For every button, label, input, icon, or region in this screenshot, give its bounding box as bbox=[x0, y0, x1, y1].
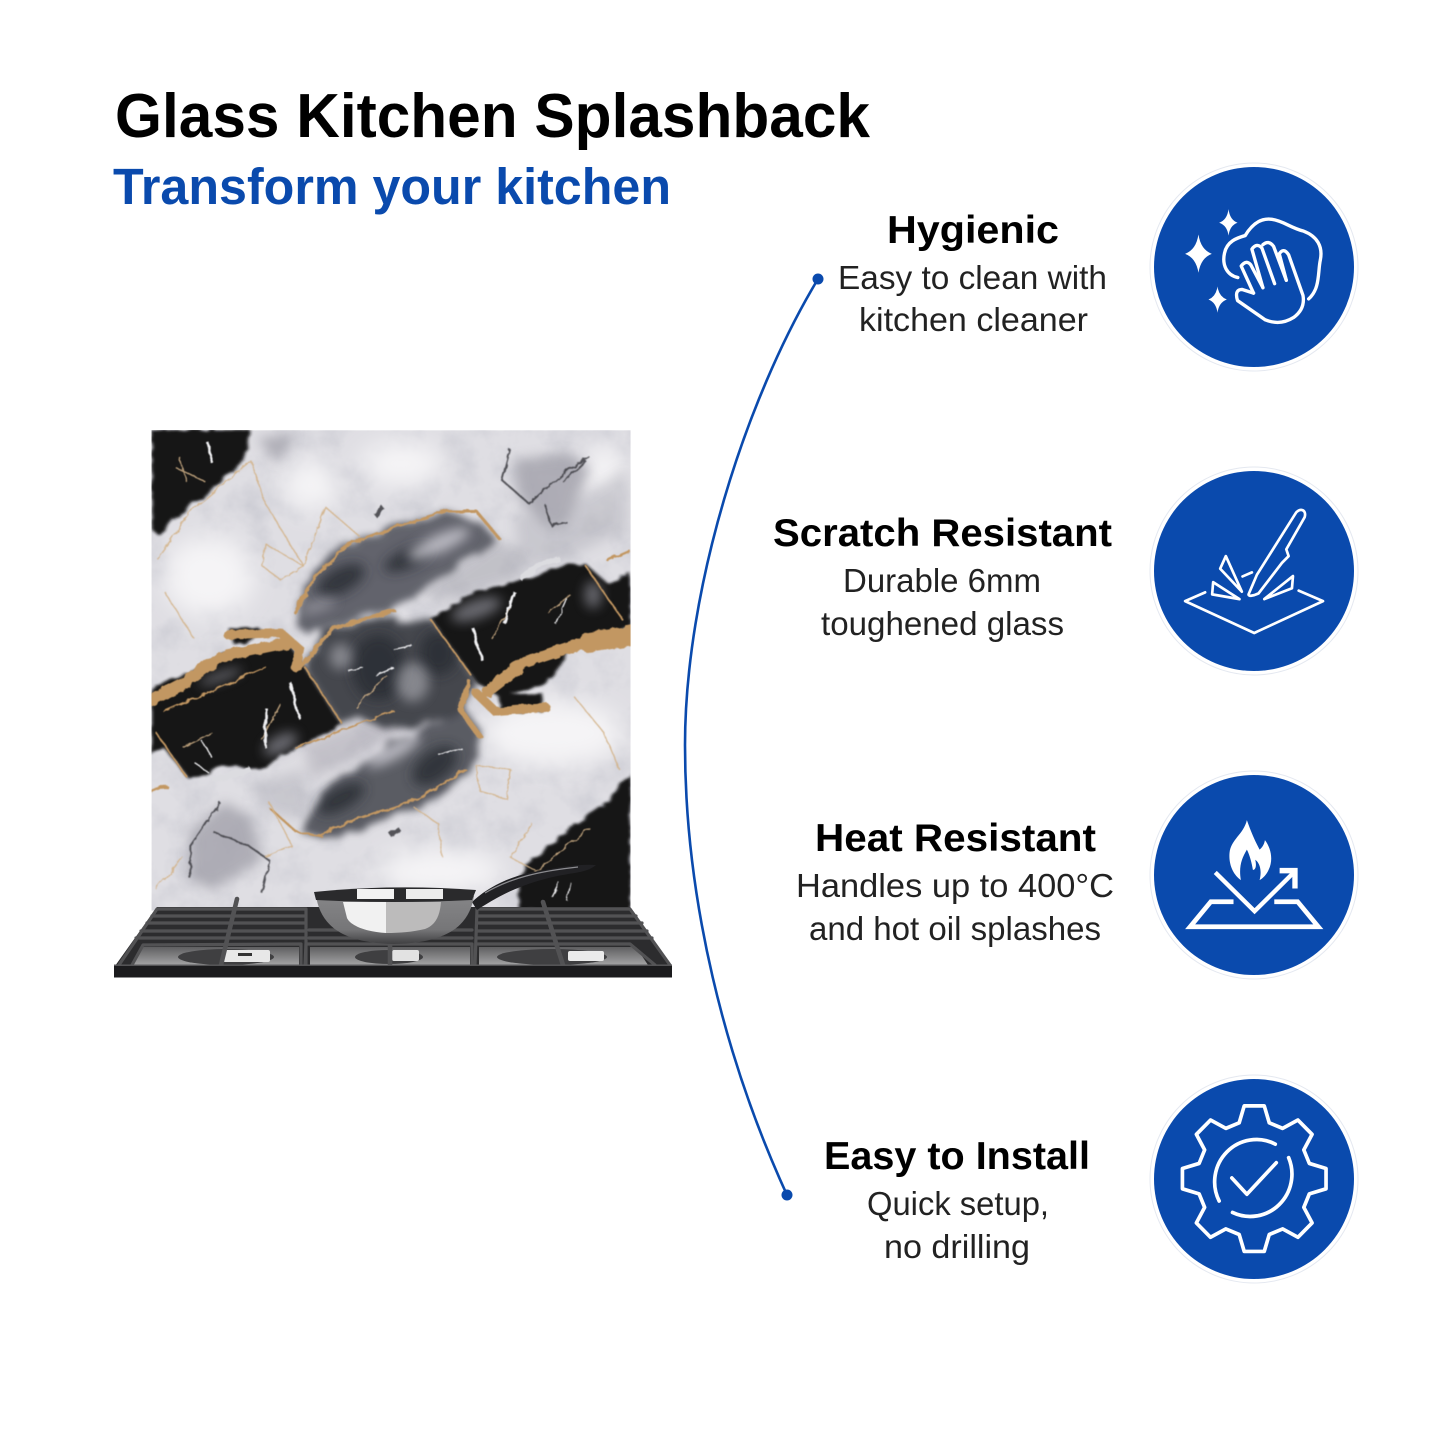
marble glass splashback bbox=[152, 430, 638, 911]
gas hob bbox=[114, 899, 672, 978]
icon: flame and heat deflection bbox=[1150, 771, 1358, 979]
frying pan bbox=[314, 865, 596, 944]
feature: heat resistant bbox=[796, 817, 1114, 947]
dark clouds in grey lobes bbox=[312, 539, 465, 821]
front bar bbox=[114, 965, 672, 978]
feature: easy to install: no drilling bbox=[884, 1228, 1030, 1265]
icon: hand wiping cloth bbox=[1150, 163, 1358, 371]
light clouds over grey lobes bbox=[299, 522, 473, 773]
feature: hygienic: Hygienic bbox=[887, 209, 1059, 252]
feature: easy to install bbox=[824, 1135, 1090, 1265]
icon: knife scratching glass bbox=[1150, 467, 1358, 675]
feature: hygienic: kitchen cleaner bbox=[859, 301, 1088, 338]
black marble lobes bbox=[152, 430, 631, 911]
feature: heat resistant: Handles up to 400°C bbox=[796, 867, 1114, 904]
feature: heat resistant: Heat Resistant bbox=[815, 817, 1096, 860]
white veins bbox=[194, 442, 570, 900]
gold veins bbox=[152, 511, 638, 837]
dark streaks in the marble bbox=[190, 449, 589, 893]
pan bowl bbox=[316, 896, 474, 944]
feature: scratch resistant: Scratch Resistant bbox=[773, 512, 1112, 555]
grey marble lobes bbox=[294, 513, 499, 839]
feature: hygienic: Easy to clean with bbox=[838, 259, 1107, 296]
pan bowl highlight bbox=[343, 902, 386, 933]
title: Glass Kitchen Splashback bbox=[115, 82, 870, 151]
hob body bbox=[115, 907, 672, 966]
feature: scratch resistant: toughened glass bbox=[821, 605, 1064, 642]
feature: easy to install: Quick setup, bbox=[867, 1185, 1049, 1222]
icon: gear with check mark bbox=[1150, 1075, 1358, 1283]
feature: hygienic bbox=[838, 209, 1107, 338]
feature: scratch resistant bbox=[773, 512, 1112, 642]
subtitle: Transform your kitchen bbox=[113, 158, 671, 215]
feature: easy to install: Easy to Install bbox=[824, 1135, 1090, 1178]
connector curve bbox=[685, 274, 824, 1200]
curve end dots bbox=[782, 274, 824, 1200]
grates bbox=[119, 899, 670, 965]
pan rim bbox=[314, 887, 476, 902]
glass burner wells bbox=[133, 947, 648, 965]
feature: heat resistant: and hot oil splashes bbox=[809, 910, 1101, 947]
feature: scratch resistant: Durable 6mm bbox=[843, 562, 1041, 599]
pan handle bbox=[472, 865, 596, 910]
burners bbox=[178, 949, 607, 965]
